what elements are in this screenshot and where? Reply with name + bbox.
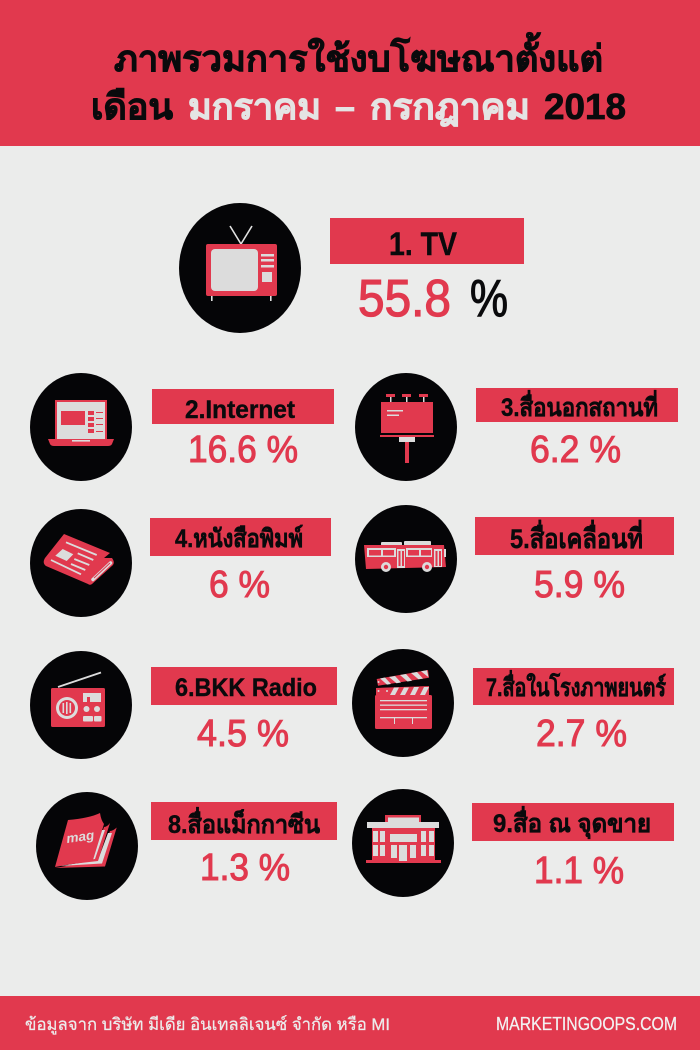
label bar: 8 magazine: 8.สื่อแม็กกาซีน <box>168 807 320 839</box>
icon: store building <box>352 789 454 897</box>
item 5: mobile media <box>355 505 674 613</box>
value: 6.2 %: 6.2 % <box>530 429 621 471</box>
value: 2.7 %: 2.7 % <box>536 713 627 755</box>
label bar: 9 point of sale <box>472 803 674 841</box>
icon: magazine: mag <box>65 827 95 846</box>
value: 6 %: 6 % <box>209 564 270 606</box>
item 3: outdoor media <box>355 373 678 481</box>
item 1: TV <box>179 203 524 333</box>
icon: billboard <box>355 373 457 481</box>
label bar: 7 cinema <box>473 668 674 705</box>
title: กรกฎาคม <box>370 86 530 127</box>
icon: radio <box>30 651 132 759</box>
title: ภาพรวมการใช้งบโฆษณาตั้งแต่ <box>114 32 603 79</box>
footer banner <box>0 996 700 1050</box>
title: มกราคม <box>188 86 321 127</box>
value: 55.8 %: 55.8 <box>358 270 451 328</box>
title: เดือน <box>91 86 173 127</box>
label bar: 9 point of sale: 9.สื่อ ณ จุดขาย <box>493 806 651 840</box>
header banner <box>0 0 700 146</box>
label bar: 2.Internet: 2.Internet <box>185 396 296 424</box>
label bar: 5 mobile <box>475 517 674 555</box>
value: 5.9 %: 5.9 % <box>534 564 625 606</box>
icon: clapperboard <box>352 649 454 757</box>
label bar: 6.BKK Radio <box>151 667 337 705</box>
icon: bus <box>355 505 457 613</box>
item 2: Internet <box>30 373 334 481</box>
icon: newspaper <box>30 509 132 617</box>
label bar: 6.BKK Radio: 6.BKK Radio <box>175 674 317 702</box>
item 6: radio <box>30 651 337 759</box>
item 7: cinema <box>352 649 674 757</box>
label bar: 3 outdoor: 3.สื่อนอกสถานที่ <box>501 390 658 422</box>
value: 4.5 %: 4.5 % <box>197 713 289 755</box>
label bar: 1. TV: 1. TV <box>389 226 458 262</box>
item 9: point of sale <box>352 789 674 897</box>
label bar: 4 newspaper: 4.หนังสือพิมพ์ <box>175 524 303 553</box>
value: 1.3 %: 1.3 % <box>200 847 290 889</box>
label bar: 8 magazine <box>151 802 337 840</box>
label bar: 5 mobile: 5.สื่อเคลื่อนที่ <box>510 519 643 554</box>
icon: magazine <box>36 792 138 900</box>
value: 1.1 %: 1.1 % <box>534 850 624 892</box>
title <box>91 32 626 127</box>
label bar: 2.Internet <box>152 389 334 424</box>
icon: television <box>179 203 301 333</box>
value: 55.8 % <box>358 270 508 328</box>
title: 2018 <box>544 86 626 127</box>
brand: MARKETINGOOPS.COM <box>496 1014 677 1034</box>
value: 16.6 %: 16.6 % <box>188 429 298 471</box>
value: 55.8 %: % <box>470 270 508 328</box>
label bar: 1. TV <box>330 218 524 264</box>
icon: laptop <box>30 373 132 481</box>
source text: ข้อมูลจาก บริษัท มีเดีย อินเทลลิเจนซ์ จำกัด หรือ MI <box>25 1015 390 1035</box>
item 8: magazine <box>36 792 337 900</box>
title: – <box>335 86 355 127</box>
label bar: 4 newspaper <box>150 518 331 556</box>
item 4: newspaper <box>30 509 331 617</box>
